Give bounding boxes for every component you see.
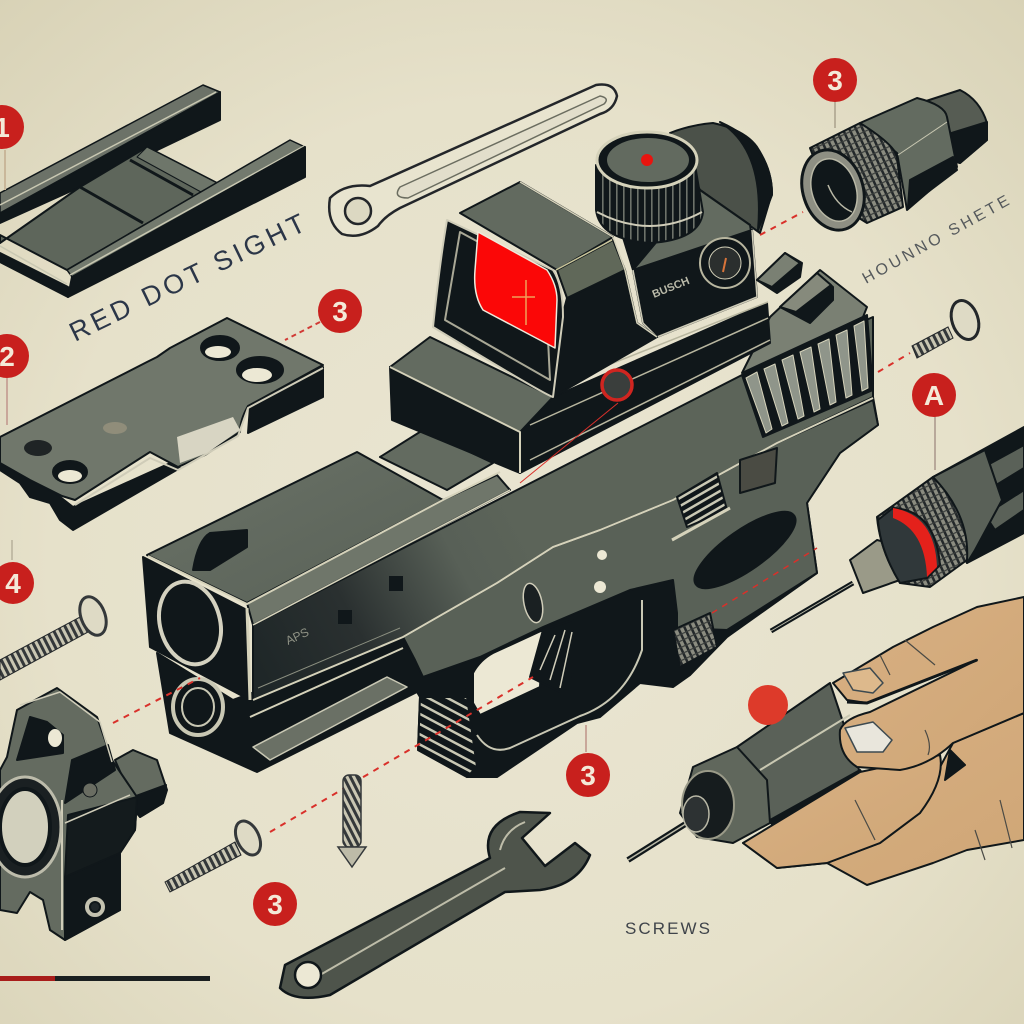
red lens [475, 232, 557, 348]
screw left [0, 593, 111, 680]
front sight [193, 530, 247, 570]
trigger [530, 620, 573, 692]
dust cover strip [253, 677, 407, 760]
slide markings: APS [283, 625, 311, 648]
callout: red dot on driver [748, 685, 788, 725]
callout 2 [0, 334, 29, 425]
part: thin wrench top [329, 84, 617, 236]
hood top [460, 182, 613, 270]
mag release [673, 613, 717, 667]
callout 3: cap: 3 [827, 65, 843, 96]
callout 1 [0, 105, 24, 190]
callout 4: driver: A [924, 380, 944, 411]
trigger guard highlight [477, 600, 642, 750]
rear serrations [742, 315, 873, 437]
hood dark side [553, 270, 657, 397]
bottom rule [0, 976, 210, 981]
takedown lever [520, 582, 546, 624]
rear barrel [670, 123, 772, 233]
callout 3: plate: 3 [332, 296, 348, 327]
dashed red guide lines [113, 212, 910, 832]
callout 3: trigger: 3 [580, 760, 596, 791]
callout 4: screw [0, 540, 34, 604]
frame silhouette [157, 397, 878, 777]
slide side and rear [253, 317, 873, 700]
rear box top [610, 190, 750, 270]
part: top-left mounting rail [0, 85, 305, 297]
small spring screw [338, 775, 366, 867]
rear sight blocks [757, 253, 833, 323]
base top [390, 337, 553, 432]
callout 3 number: 3 [267, 889, 283, 920]
window [433, 220, 563, 397]
optic plate [380, 430, 493, 490]
callout 3: bottom [253, 882, 297, 926]
label: screws: SCREWS [625, 919, 710, 938]
grip serration [418, 697, 477, 777]
label: red dot sight: RED DOT SIGHT [65, 208, 310, 347]
frame pins [597, 550, 607, 560]
lower base dark [520, 303, 770, 473]
wrench [280, 812, 590, 998]
slide stop [677, 473, 727, 527]
hand [743, 597, 1024, 885]
sight ring [602, 370, 632, 400]
trigger opening [473, 630, 543, 715]
sight text: BUSCH [651, 275, 691, 301]
rear slide top [742, 270, 867, 373]
part: upper screwdriver [771, 427, 1024, 631]
callout 4: screw: 4 [5, 568, 21, 599]
side dial [700, 238, 750, 288]
lower finger [743, 755, 941, 868]
part: mounting plate [0, 318, 323, 530]
slide top [147, 452, 443, 603]
callout 3: trigger [566, 725, 610, 797]
index nail [843, 668, 883, 693]
index finger [833, 597, 1024, 770]
part: red dot sight [390, 122, 772, 473]
front face [143, 557, 250, 700]
part: top-right lens cap [792, 90, 987, 238]
thumb nail [845, 722, 892, 752]
label: mounting sheet: HOUNNO SHETE [860, 193, 1012, 287]
callout 3: plate [285, 289, 362, 340]
rear box side [633, 230, 757, 337]
crosshair [512, 280, 535, 325]
callout 4: driver [912, 373, 956, 470]
callout 3: cap [813, 58, 857, 128]
palm [743, 713, 1024, 885]
muzzle bore [150, 575, 230, 671]
grip oval [684, 499, 806, 601]
side strip [247, 475, 510, 625]
frame gray [403, 400, 878, 677]
screw right [912, 297, 984, 358]
part: lower screwdriver [628, 683, 866, 860]
turret [596, 165, 703, 243]
screw bottom [165, 817, 266, 892]
base front [390, 367, 520, 473]
part: front mount [0, 688, 167, 940]
part: pistol [143, 270, 878, 777]
